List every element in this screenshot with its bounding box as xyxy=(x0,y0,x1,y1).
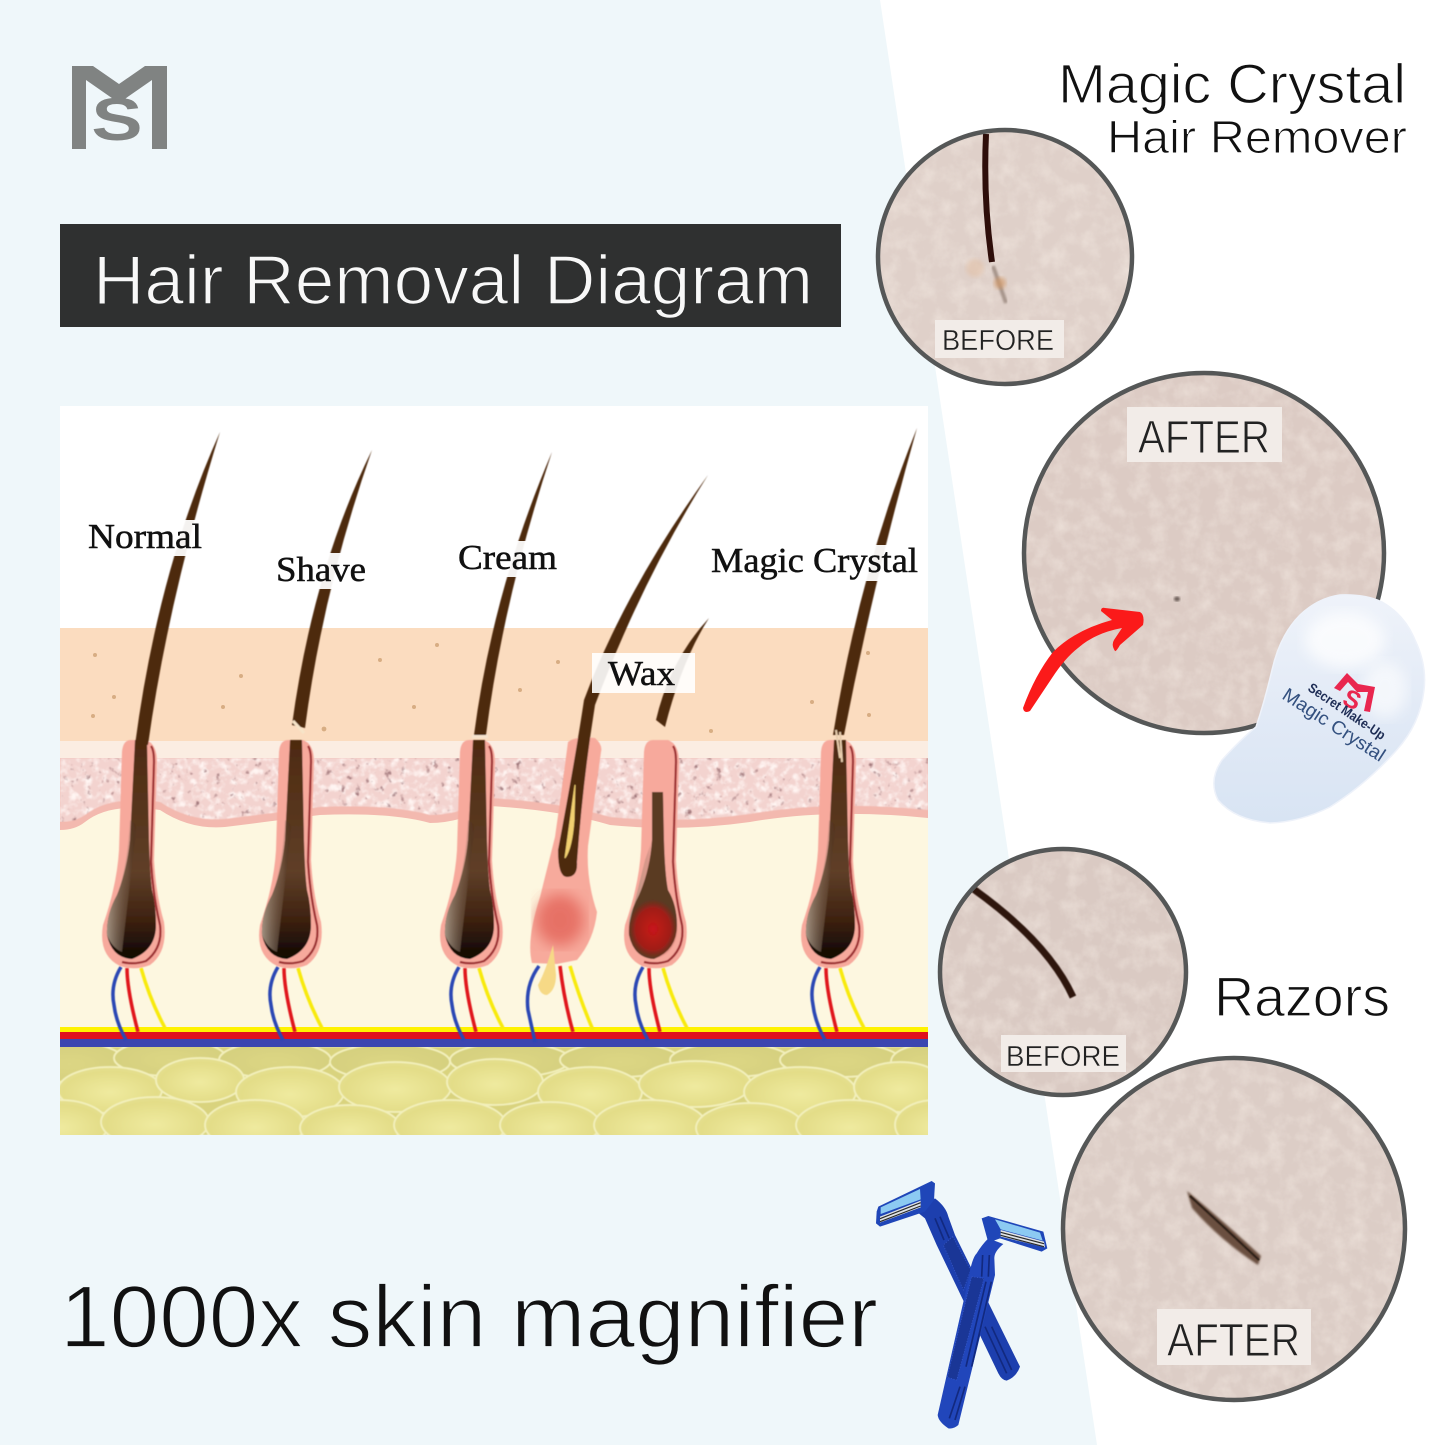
diagram: blood vessels and nerve lines xyxy=(60,1027,928,1047)
title text: Hair Removal Diagram xyxy=(93,241,813,319)
icon: crossed blue razors xyxy=(876,1181,1047,1429)
label: Normal: Normal xyxy=(88,517,202,556)
razor: front xyxy=(938,1216,1047,1429)
product text: name: Magic Crystal xyxy=(1278,685,1389,766)
diagram: outer skin layers xyxy=(60,406,928,1028)
heading: Razors: Razors xyxy=(1214,965,1390,1028)
label: Wax: Wax xyxy=(608,654,676,693)
product logo xyxy=(1334,673,1375,716)
heading: Magic Crystal Hair Remover: Magic Crystal xyxy=(1058,52,1406,115)
follicle: magic crystal xyxy=(801,428,917,1040)
magnified photo: razor after xyxy=(1063,1058,1405,1400)
caption: 1000x skin magnifier: 1000x skin magnifier xyxy=(60,1267,878,1366)
title bar xyxy=(60,224,841,327)
razor: back xyxy=(876,1181,1020,1381)
arrow: red curved arrow xyxy=(1023,608,1144,712)
follicle: cream xyxy=(440,452,552,1040)
follicle: shave xyxy=(259,450,372,1040)
follicle: wax, pulled hair xyxy=(527,475,708,1042)
product: magic crystal stone xyxy=(1214,595,1425,823)
diagram: yellow fat cells xyxy=(60,1047,928,1135)
heading: Magic Crystal Hair Remover: Hair Remover xyxy=(1107,111,1407,163)
label: Wax xyxy=(592,653,695,693)
magnified photo: razor before xyxy=(940,849,1186,1095)
badge: BEFORE: BEFORE xyxy=(1006,1041,1120,1073)
follicle: normal xyxy=(102,432,220,1040)
badge: BEFORE: BEFORE xyxy=(942,325,1054,357)
follicle: wax, regrowth with red bulb xyxy=(624,618,709,1040)
magnified photo: crystal after xyxy=(1024,373,1384,733)
logo: MS monogram: S xyxy=(91,86,143,153)
logo: MS monogram xyxy=(72,66,167,153)
label: Magic Crystal: Magic Crystal xyxy=(711,541,918,580)
light blue diagonal background panel xyxy=(0,0,1097,1445)
product logo: S xyxy=(1339,684,1365,716)
label: Shave: Shave xyxy=(276,550,366,589)
badge: AFTER: AFTER xyxy=(1138,411,1270,463)
product text: brand: Secret Make-Up xyxy=(1305,680,1388,743)
hair anatomy diagram xyxy=(60,406,928,1135)
label: Cream: Cream xyxy=(458,538,557,577)
badge: AFTER: AFTER xyxy=(1167,1314,1300,1366)
heading: Magic Crystal Hair Remover xyxy=(1058,52,1407,163)
magnified photo: crystal before xyxy=(878,130,1132,384)
